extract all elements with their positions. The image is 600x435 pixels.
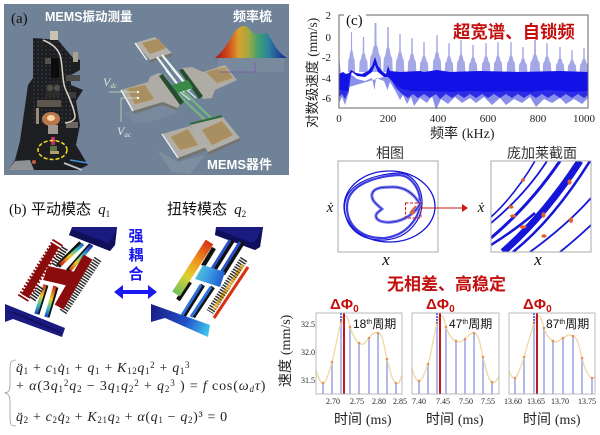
panel a: MEMS measurement [4,4,289,175]
period label: 周期 [372,317,396,331]
phase marker [343,313,345,394]
equation line 1: q [172,361,180,376]
dashed reference [533,313,535,323]
equation line 1: 1 [65,366,71,376]
equation line 1: 3 [185,360,190,370]
section curves [491,161,591,252]
equations [5,360,266,426]
label c backing [344,11,366,27]
equation line 3: 2 [188,415,193,425]
brace [5,360,16,426]
section points [509,178,573,238]
phase label: 0 [449,304,455,315]
stems [323,322,396,394]
equation line 1: 12 [127,366,137,376]
heading: phase portrait: 相图 [376,145,404,161]
waveform [509,316,595,378]
equation line 2: q [157,379,165,394]
label: strong coupling: 耦 [128,246,144,264]
sample dots [418,322,493,383]
equation line 2: 2 [64,378,69,388]
panel b: coupled modes [5,201,266,426]
ticks: 7.40 [412,397,426,406]
x axis ticks: 200 [380,113,397,125]
spectrum mid band [339,74,588,99]
heading: MEMS device: MEMS器件 [207,157,272,172]
equation line 2: 2 [129,384,134,394]
equation line 2: + α(3q [16,379,59,394]
equation line 3: + [29,410,46,425]
frame [316,313,402,394]
equation line 1: + [29,361,46,376]
period label: 18 [353,317,366,331]
period label: th [559,319,565,326]
heading: translational mode: 平动模态 q [31,201,106,218]
equation line 1: 1 [24,366,29,376]
heading: no phase difference, high stability: 无相差、高稳定 [387,274,506,294]
section frame [491,161,591,252]
equation line 3: 2 [115,415,120,425]
diagram: MEMS device [121,37,240,174]
label: strong coupling: 合 [128,265,144,283]
waveform [316,315,402,384]
label: Vdc: V [103,75,110,89]
phase label: ΔΦ [523,296,546,313]
ticks [504,397,596,406]
label a: (a) [11,11,28,27]
panel: poincare section [477,145,591,269]
equation line 2: 2 [165,384,170,394]
y axis ticks [322,10,332,105]
equation line 1: + [155,361,172,376]
ticks [326,397,407,406]
ticks: 13.60 [504,397,522,406]
y axis ticks: -2 [322,52,331,64]
panel c: spectrum chart [305,10,596,142]
period label: 47 [449,317,462,331]
equation line 1: K [117,361,127,376]
label: Vac: V [117,124,124,138]
equation line 1: q [137,361,145,376]
ticks: 13.70 [551,397,569,406]
heading: torsional mode: 扭转模态 q [167,201,242,218]
phase orbits [344,171,435,242]
equation line 2: 1 [116,384,121,394]
equation line 2: 2 [77,384,82,394]
equation line 2: q [108,379,116,394]
equation line 2: 1 [59,384,64,394]
chart frame [339,15,588,108]
waveform [412,316,499,383]
equation line 3: )³ = 0 [193,410,228,425]
label: strong coupling [128,228,144,283]
label: Vdc: dc [110,82,118,90]
equation line 3: q̇ [58,410,65,425]
equation line 1: 1 [53,366,58,376]
arrow: double-headed coupling [114,285,157,299]
y axis ticks: 31.5 [301,376,315,385]
highlight box [406,203,421,218]
label: Vac: ac [124,131,132,139]
equation line 2: τ [255,379,261,394]
heading: poincare section: 庞加莱截面 [507,145,577,161]
equation line 3: 2 [24,415,29,425]
connector: comb to pad [219,62,255,72]
equation line 1: c [46,361,53,376]
label: strong coupling: 强 [128,228,144,245]
y axis ticks: -4 [322,73,331,85]
x axis ticks: 1000 [573,113,596,125]
period label: 周期 [468,317,492,331]
label b: (b) [9,202,26,218]
y axis label: velocity: 速度 (mm/s) [277,314,294,387]
axis label xdot: ẋ [326,200,334,216]
ticks [412,397,495,406]
equation line 1: 1 [145,366,150,376]
equation line 2: f cos(ω [203,379,250,394]
equation line 1: 2 [150,360,155,370]
equation line 3: + [120,410,137,425]
x axis ticks: 800 [530,113,547,125]
chart: 87th period [504,296,596,428]
x axis ticks: 0 [336,113,342,125]
heading: torsional mode: 2 [242,209,246,219]
equation line 3: − [163,410,180,425]
equation line 2: q [121,379,129,394]
icon: frequency comb spectrum [215,26,287,58]
y axis label: 对数级速度 (mm/s) [305,18,320,128]
icon: yellow dashed ring [38,140,67,160]
y axis ticks: 32.0 [301,348,315,357]
x axis ticks: 400 [430,113,447,125]
wires: drive voltage leads [109,91,139,122]
axis label: 时间 (ms) [334,411,392,428]
phase label: 0 [546,304,552,315]
chart: 18th period [316,296,407,428]
equation line 3: q [180,410,188,425]
dashed reference [436,313,438,323]
axis label xdot: ẋ [477,200,485,216]
axis label x: x [381,250,390,269]
frame [509,313,595,394]
y axis ticks [301,320,315,385]
equation line 3: q̈ [16,410,24,425]
label c: (c) [346,13,363,29]
ticks: 7.55 [481,397,495,406]
heading: MEMS vibration measurement: MEMS振动测量 [45,9,133,24]
chart: 47th period [412,296,499,428]
device: torsional mode [151,227,263,337]
period label: 87 [546,317,559,331]
ticks: 13.75 [578,397,596,406]
equation line 2: ) = [176,379,203,394]
x axis ticks [336,113,596,125]
equation line 3: 2 [53,415,58,425]
period label: th [462,319,468,326]
sample dots [322,321,397,384]
equation line 3: 1 [158,415,163,425]
phase portrait frame [338,161,438,252]
x axis label: 频率 (kHz) [430,125,495,142]
equation line 2: + [140,379,157,394]
spectrum light comb [338,23,588,78]
equation line 3: 2 [65,415,71,425]
equation line 2: − 3 [82,379,108,394]
y axis ticks: -6 [322,93,331,105]
ticks: 2.70 [326,397,340,406]
ticks: 2.80 [372,397,386,406]
equation line 1: q̇ [58,361,65,376]
y axis ticks: 0 [326,32,332,44]
dashed reference [340,313,342,322]
panel: phase portrait [326,145,468,269]
equation line 3: c [46,410,53,425]
equation line 1: q̈ [16,361,24,376]
equation line 2: d [250,384,255,394]
phase label: ΔΦ [330,296,353,313]
axis label: 时间 (ms) [523,411,581,428]
photo: optical measurement tower [8,31,88,170]
period label: 周期 [565,317,589,331]
stems [515,323,592,394]
ticks: 7.50 [459,397,473,406]
ticks: 2.75 [350,397,364,406]
period label: th [366,319,372,326]
equation line 2: 3 [170,378,176,388]
phase marker [536,313,538,394]
y axis ticks: 2 [326,10,331,22]
equation line 3: 21 [97,415,108,425]
spectrum dense band [339,57,588,92]
equation line 3: K [87,410,97,425]
equation line 3: + [71,410,87,425]
phase label: 0 [353,304,359,315]
heading: frequency comb: 频率梳 [233,9,272,24]
heading: ultra-wide spectrum, self-locked frequency: 超宽谱、自锁频 [453,22,575,42]
sample dots [514,322,593,379]
spectrum light lower spikes [339,75,588,110]
ticks: 7.45 [436,397,450,406]
phase marker [439,313,441,394]
axis label: 时间 (ms) [426,411,484,428]
equation line 2: 2 [134,378,140,388]
equation line 3: α(q [137,410,158,425]
y axis ticks: 32.5 [301,320,315,329]
equation line 1: 1 [180,366,185,376]
equation line 1: 1 [95,366,100,376]
ticks: 13.65 [527,397,545,406]
stems [419,323,492,394]
reflection under comb [218,58,284,72]
poincare points in box [410,206,416,214]
x axis ticks: 600 [480,113,497,125]
equation line 1: + [71,361,87,376]
device: translational mode [5,227,117,337]
equation line 2: q [69,379,77,394]
equation line 1: + [100,361,117,376]
phase label: ΔΦ [426,296,449,313]
equation line 1: q [87,361,95,376]
arrow: zoom to section [421,204,468,212]
ticks: 2.85 [393,397,407,406]
heading: translational mode: 1 [106,209,110,219]
frame [412,313,499,394]
panel a background [4,4,289,175]
axis label x: x [533,250,542,269]
equation line 3: q [108,410,115,425]
equation line 2: ) [261,379,266,394]
